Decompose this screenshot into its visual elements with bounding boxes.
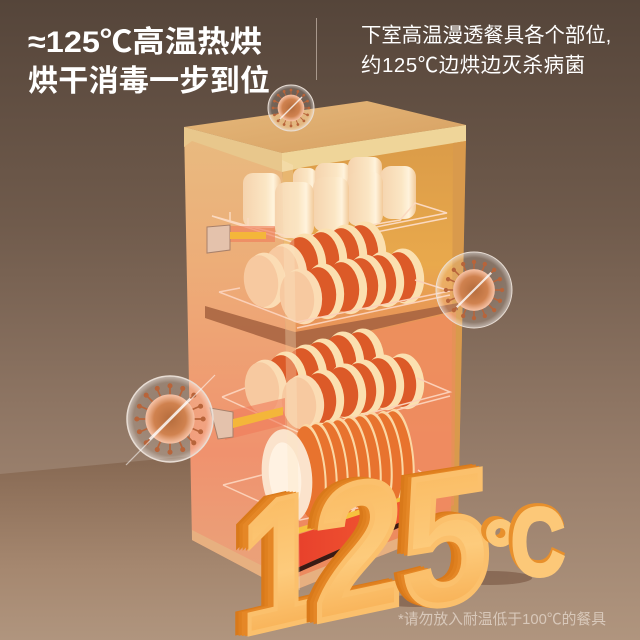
front bowls [380,246,428,307]
wire rack 4 [223,470,445,520]
numeral 1 [235,490,310,637]
wire rack 1 [212,203,447,248]
degree celsius symbol: C [507,486,565,593]
dish plates [223,407,445,573]
title: 烘干消毒一步到位 [28,64,270,98]
number shadows [380,571,532,607]
description text: 约125℃边烘边灭杀病菌 [361,54,585,77]
title [28,26,270,98]
big numerals [235,464,565,637]
heater bracket 2 [210,398,285,440]
back bowls [340,326,388,387]
numeral 5 [394,464,490,609]
description text: 下室高温漫透餐具各个部位, [361,24,611,47]
cabinet top front frame [282,125,466,172]
bottom heating element [297,500,405,568]
yellow heater strip [297,496,405,534]
description text [361,24,611,77]
virus bubble right [436,252,512,328]
white front plate [257,427,317,525]
degree celsius symbol: C [511,489,565,596]
virus bubble top [268,85,314,131]
wire rack 2 [219,280,450,328]
middle shelf [205,303,458,348]
virus bubble left [126,375,215,465]
translucent front-left post [282,160,300,592]
heater bracket 1 [207,225,275,253]
lower bowls [210,326,450,440]
footnote: *请勿放入耐温低于100℃的餐具 [398,611,606,628]
wire rack 3 [222,378,450,436]
cabinet front interior [282,125,466,592]
front bowls [380,351,428,412]
numeral 2 [306,476,400,624]
cabinet left side [184,127,290,592]
cabinet top face [184,101,466,153]
lower compartment glow [300,312,456,570]
title: ≈125℃高温热烘 [28,26,262,59]
cabinet top side frame [184,127,282,172]
degree celsius symbol: ° [479,501,512,592]
front cups [243,166,416,238]
floor [0,456,300,640]
upper bowls [219,219,450,328]
cups shelf [207,157,447,253]
cabinet lower base [192,515,458,592]
degree celsius symbol: ° [484,504,517,595]
divider [316,18,318,80]
back bowls [342,219,390,280]
back cups [293,157,382,198]
cabinet [184,101,466,592]
bottom heater shadow [297,520,405,573]
cabinet right frame [451,141,466,527]
degree celsius symbol [481,503,565,578]
